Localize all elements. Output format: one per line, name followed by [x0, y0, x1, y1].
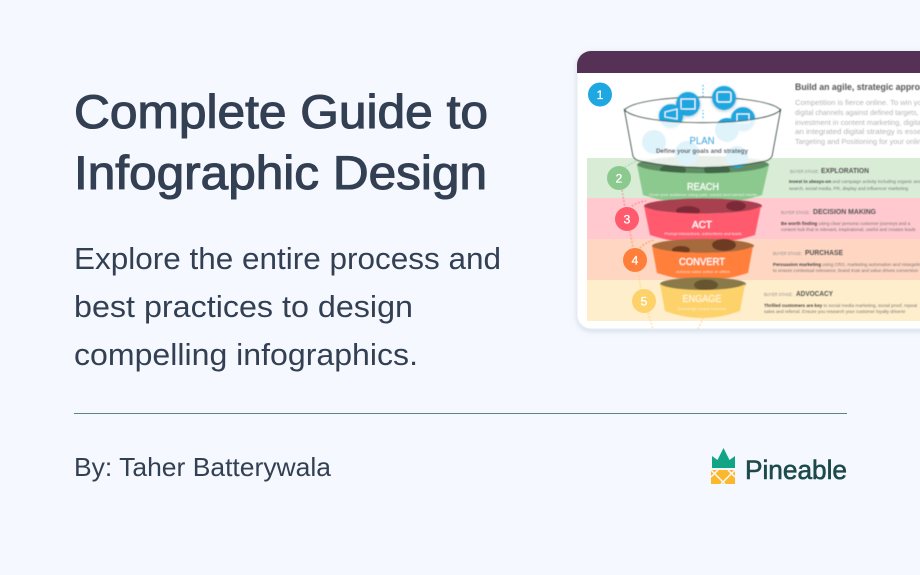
funnel: plan	[624, 86, 780, 168]
plan icons behind funnel	[642, 86, 755, 168]
stage text: advocacy: sales and referral. Ensure you research your customer loyalty drivers!	[764, 309, 905, 314]
stage text: advocacy: BUYER STAGE:	[764, 292, 793, 297]
subtitle: Explore the entire process and	[74, 241, 501, 276]
title: Complete Guide to	[74, 85, 488, 138]
stage text: purchase: to ensure contextual relevance, brand trust and value drives conversion	[773, 268, 919, 273]
stage bands	[587, 158, 920, 321]
stage text: decision making: BUYER STAGE:	[781, 210, 810, 215]
step badge 5	[632, 289, 656, 313]
stage text: exploration: search, social media, PR, display and influencer marketing	[789, 186, 909, 191]
stage text: advocacy	[764, 291, 918, 314]
step badge 1: 1	[597, 88, 604, 102]
stage text: exploration: BUYER STAGE:	[790, 169, 819, 174]
funnel: act: Prompt interactions, subscribers and leads	[664, 232, 742, 236]
funnel: plan: PLAN	[690, 136, 714, 147]
stage text: decision making: DECISION MAKING	[813, 209, 877, 216]
funnel: act	[644, 198, 762, 244]
funnel: reach	[637, 156, 769, 204]
stage text: decision making: Be worth finding using clear persona customer journeys and a	[781, 221, 911, 226]
dotted connectors	[622, 85, 703, 329]
subtitle	[74, 241, 501, 372]
stage text: exploration	[789, 168, 920, 191]
stage text: advocacy: ADVOCACY	[796, 291, 833, 298]
author byline: By: Taher Batterywala	[74, 452, 332, 482]
stage text: exploration: EXPLORATION	[821, 168, 869, 175]
funnel: plan: Define your goals and strategy	[656, 148, 748, 155]
stage text: purchase: BUYER STAGE:	[773, 251, 802, 256]
stage text: decision making	[781, 209, 916, 232]
funnel: convert	[652, 239, 754, 280]
icon: pineapple	[711, 448, 735, 484]
stage text: advocacy: Thrilled customers are key to social media marketing, social proof, repeat	[764, 303, 918, 308]
card header bar	[577, 51, 920, 73]
funnel: act: ACT	[692, 220, 712, 231]
intro text block	[795, 82, 920, 146]
subtitle: compelling infographics.	[74, 337, 418, 372]
step badge 4	[623, 248, 647, 272]
stage text: exploration: Invest in always-on and campaign activity including organic and	[789, 179, 920, 184]
funnel: reach: Grow your audience using paid, owned and earned media	[649, 193, 758, 197]
wordmark: Pineable	[745, 455, 847, 485]
step badge 4: 4	[632, 254, 639, 268]
divider	[74, 413, 847, 414]
stage text: decision making: content hub that is relevant, inspirational, useful and creates leads	[781, 227, 916, 232]
logo: Pineable	[711, 448, 847, 485]
step badge 3	[615, 207, 639, 231]
title: Infographic Design	[74, 146, 487, 199]
funnel: engage: Encourage repeat business	[678, 307, 727, 311]
step badge 3: 3	[624, 212, 631, 226]
step badge 1	[588, 82, 612, 106]
step badge 2	[607, 166, 631, 190]
step badge 2: 2	[616, 172, 623, 186]
funnel: engage: ENGAGE	[682, 294, 722, 305]
stage text: purchase	[773, 250, 920, 273]
funnel: convert: CONVERT	[679, 257, 725, 268]
panel: infographic preview card	[577, 51, 920, 329]
funnel: convert: Achieve sales online or offline	[676, 270, 730, 274]
funnel: engage	[660, 278, 746, 318]
title	[74, 85, 488, 199]
subtitle: best practices to design	[74, 289, 413, 324]
stage text: purchase: Persuasion marketing using CRO, marketing automation and retargeting	[773, 262, 920, 267]
funnel: reach: REACH	[687, 182, 719, 193]
step badge 5: 5	[641, 294, 648, 308]
stage text: purchase: PURCHASE	[805, 250, 843, 257]
